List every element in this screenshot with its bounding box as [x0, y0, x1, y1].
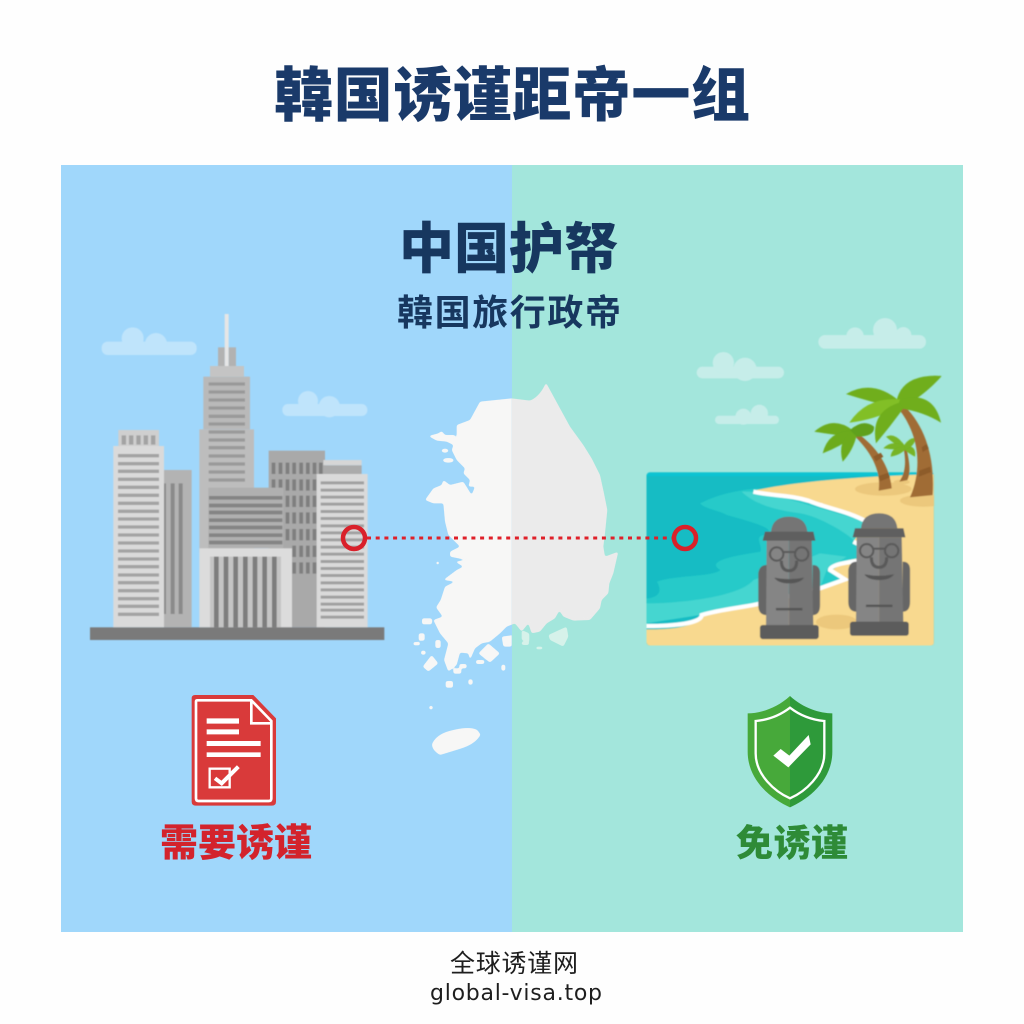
label: visa required: 需要诱谨: [160, 823, 312, 865]
heading: passport: 中国护帑: [399, 218, 619, 280]
panel: visa free side (teal): [512, 165, 963, 932]
large palm: [846, 376, 942, 497]
icon: visa document: [192, 695, 276, 806]
title: 韓国诱谨距帝一组: [274, 63, 750, 129]
shallow water: [646, 488, 856, 604]
sand: [647, 474, 934, 646]
building: central spire tower: [199, 314, 254, 553]
label: visa free: 免诱谨: [736, 823, 848, 864]
middle palm: [814, 423, 892, 491]
palm trees: [814, 376, 942, 497]
illustration: city skyline: [90, 314, 384, 640]
building: left tower: [113, 430, 164, 627]
Jeju stone statue (hareubang) right: [848, 513, 910, 636]
cloud: [818, 318, 926, 349]
subheading: travel policy: 韓国旅行政帝: [397, 292, 621, 333]
cloud: [282, 391, 367, 417]
small palm: [883, 435, 916, 482]
building: middle striped block: [208, 488, 283, 548]
panel: China passport side (blue): [61, 165, 512, 932]
icon: shield check: [748, 696, 832, 807]
footer: site url: global-visa.top: [430, 981, 602, 1006]
cloud: [102, 327, 197, 355]
red dotted connector line: [367, 536, 672, 540]
building: back right grid tower: [269, 451, 325, 627]
illustration: Jeju beach: [647, 318, 947, 646]
footer: site name: 全球诱谨网: [450, 950, 578, 978]
ground: [90, 627, 384, 640]
sand shadows: [816, 480, 947, 629]
foam: [647, 492, 867, 626]
beach scene: [647, 472, 947, 646]
Jeju stone statue (hareubang) left: [758, 517, 820, 639]
marker: Seoul city: [343, 527, 365, 549]
cloud: [715, 405, 779, 425]
cloud: [697, 352, 784, 381]
building: back left: [163, 470, 192, 627]
marker: Jeju sea: [674, 527, 696, 549]
building: front lobby: [199, 548, 292, 627]
map: Jeju island: [432, 728, 481, 755]
illustration: Korea map: [413, 383, 618, 755]
building: right tower: [317, 460, 368, 627]
